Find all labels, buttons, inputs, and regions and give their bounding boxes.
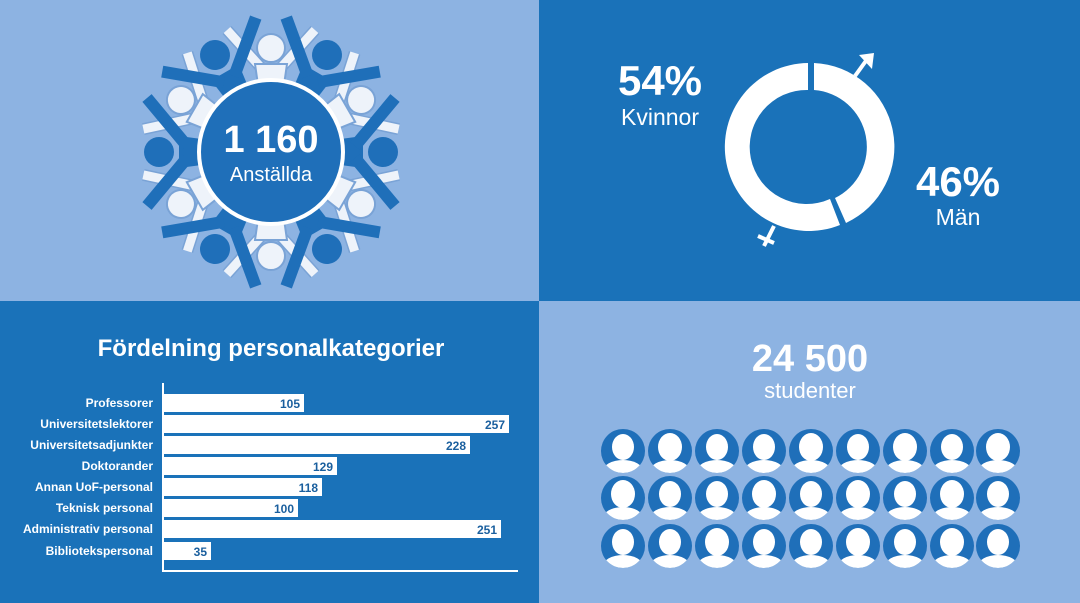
bar chart: staff categories: 100 <box>274 502 294 516</box>
bar chart: staff categories: Annan UoF-personal <box>35 480 153 494</box>
text: men share: 46% <box>916 158 1000 205</box>
donut chart: gender <box>725 53 894 246</box>
text: women share: 54% <box>618 57 702 104</box>
bar chart: staff categories: 118 <box>299 481 318 495</box>
text: women share: Kvinnor <box>621 104 699 130</box>
text: students count <box>752 338 868 403</box>
icons: student avatars grid <box>601 429 1020 577</box>
panel: gender background <box>539 0 1080 301</box>
bar chart: staff categories: Bibliotekspersonal <box>46 544 153 558</box>
bar chart: staff categories: Universitetsadjunkter <box>30 438 153 452</box>
text: employees count: Anställda <box>230 164 313 186</box>
bar chart: staff categories: Administrativ personal <box>23 522 153 536</box>
text: employees count: 1 160 <box>223 119 319 161</box>
bar chart: staff categories: Universitetslektorer <box>40 417 153 431</box>
bar chart: staff categories: Teknisk personal <box>56 501 153 515</box>
bar chart: staff categories <box>23 383 518 572</box>
text: students count: 24 500 <box>752 338 868 380</box>
bar chart: staff categories: 35 <box>194 545 207 559</box>
panel: students background <box>539 301 1080 603</box>
panel: categories background <box>0 301 539 603</box>
bar chart: staff categories: 129 <box>313 460 333 474</box>
emblem: staff figures ring <box>143 15 399 289</box>
bar chart: staff categories: Professorer <box>86 396 153 410</box>
bar chart: staff categories: 257 <box>485 418 505 432</box>
text: men share: Män <box>936 204 980 230</box>
bar chart: staff categories: 105 <box>280 397 300 411</box>
text: employees count <box>223 119 319 186</box>
text: men share <box>916 158 1000 230</box>
panel: employees background <box>0 0 539 301</box>
bar chart: staff categories: 251 <box>477 523 497 537</box>
text: students count: studenter <box>764 378 856 403</box>
text: women share <box>618 57 702 130</box>
bar chart: staff categories: 228 <box>446 439 466 453</box>
bar chart: staff categories: Doktorander <box>82 459 153 473</box>
heading: categories: Fördelning personalkategorier <box>98 335 444 362</box>
